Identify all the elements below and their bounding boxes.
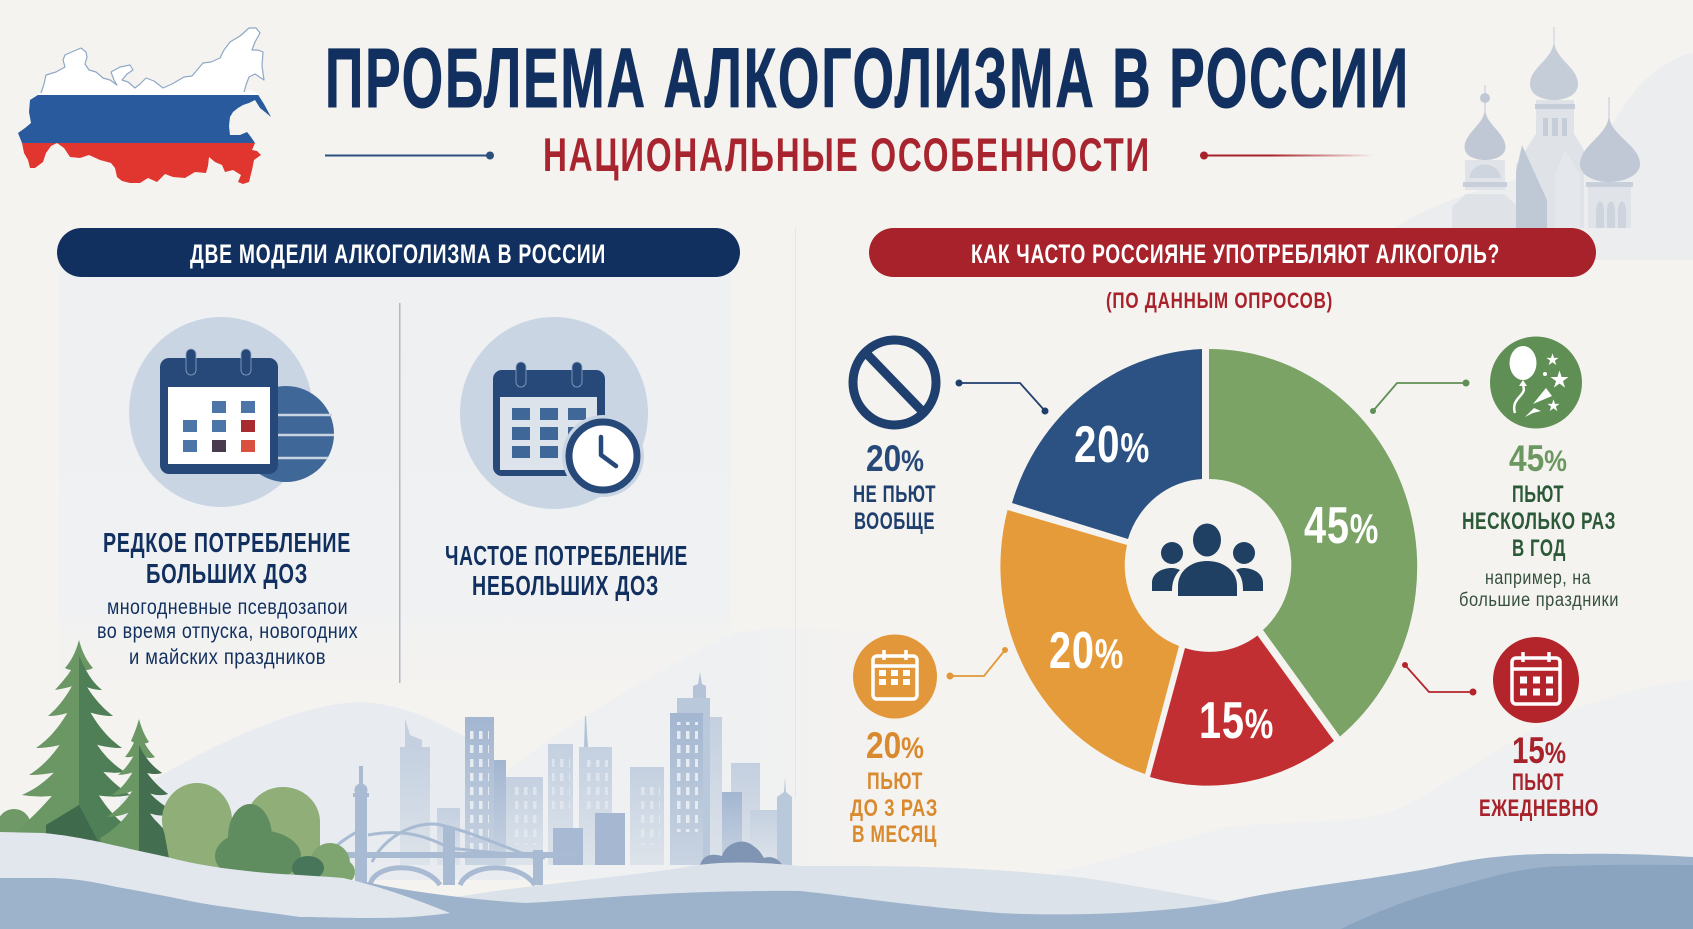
icon: prohibition [853, 340, 936, 425]
connector [956, 380, 1048, 414]
subtitle: НАЦИОНАЛЬНЫЕ ОСОБЕННОСТИ [543, 128, 1151, 181]
text: frequent small doses [445, 540, 688, 601]
callout: daily: 15% [1512, 730, 1566, 771]
callout: no drinking: ВООБЩЕ [854, 508, 935, 535]
callout: no drinking: 20% [866, 438, 924, 479]
slice: 20% orange: 20% [1049, 622, 1124, 680]
slice: 45% [1209, 349, 1417, 736]
icon: balloon and stars: ★ [1547, 398, 1560, 413]
callout: up to 3 times a month: В МЕСЯЦ [852, 821, 937, 848]
hill: right dark ground [1341, 865, 1693, 929]
callout: several times a year: например, на [1485, 568, 1591, 589]
callout: daily [1402, 637, 1599, 822]
city skyline [400, 672, 792, 865]
slice: 20% orange [1000, 510, 1179, 774]
icon: balloon and stars [1510, 346, 1569, 417]
left small bush [0, 809, 31, 843]
map of Russia in flag colours [18, 28, 271, 184]
callout: no drinking [853, 340, 1048, 535]
callout: several times a year: ПЬЮТ [1512, 481, 1564, 508]
text: frequent small doses: ЧАСТОЕ ПОТРЕБЛЕНИЕ [445, 540, 688, 571]
callout: up to 3 times a month: 20% [866, 725, 924, 766]
pie chart [1000, 349, 1417, 786]
connector [1370, 380, 1470, 414]
slice: 20% blue [1012, 349, 1202, 539]
callout: several times a year: НЕСКОЛЬКО РАЗ [1462, 508, 1616, 535]
text: rare large doses [97, 527, 358, 669]
callout: up to 3 times a month: ДО 3 РАЗ [850, 795, 938, 822]
background hills: left mountain [120, 629, 920, 880]
subtitle left rule [325, 152, 494, 160]
text: frequent small doses: НЕБОЛЬШИХ ДОЗ [472, 570, 659, 601]
left pill heading [57, 228, 740, 277]
icon: calendar with clock [460, 317, 648, 509]
callout: several times a year: большие праздники [1459, 590, 1619, 611]
section divider [795, 228, 796, 798]
callout: up to 3 times a month: ПЬЮТ [867, 768, 923, 795]
slice: 45%: 45% [1304, 497, 1379, 555]
background hill: right pale slope [1056, 680, 1693, 929]
icon: people [1152, 524, 1263, 596]
icon: calendar orange [873, 650, 917, 699]
text: rare large doses: многодневные псевдозапои [107, 596, 348, 619]
slice: 15%: 15% [1199, 692, 1274, 750]
icon: calendar red [1512, 652, 1560, 704]
text: rare large doses: во время отпуска, новогодних [97, 620, 358, 643]
background hill behind church [1395, 53, 1693, 260]
small blue bush [700, 842, 783, 866]
connector [946, 647, 1008, 680]
hill: left snow foreground [0, 832, 450, 918]
hill: bottom blue ground [0, 854, 1693, 929]
panel: frequency survey [850, 228, 1619, 848]
icon: calendar with globe [129, 317, 334, 507]
bridge [322, 766, 580, 885]
survey note: (ПО ДАННЫМ ОПРОСОВ) [1106, 288, 1333, 313]
callout: several times a year [1370, 336, 1619, 611]
hill: right snow band [440, 862, 1227, 929]
slice: 20% blue: 20% [1074, 416, 1150, 474]
bushes [162, 783, 355, 884]
text: rare large doses: РЕДКОЕ ПОТРЕБЛЕНИЕ [103, 527, 351, 558]
church silhouette [1452, 27, 1640, 228]
model divider [399, 303, 400, 683]
callout: several times a year: В ГОД [1512, 535, 1566, 562]
callout: daily: ЕЖЕДНЕВНО [1479, 795, 1599, 822]
callout: several times a year: 45% [1509, 438, 1567, 479]
callout: no drinking: НЕ ПЬЮТ [853, 481, 936, 508]
connector [1402, 662, 1476, 696]
big fir tree [22, 640, 130, 842]
left pill heading: ДВЕ МОДЕЛИ АЛКОГОЛИЗМА В РОССИИ [190, 239, 606, 269]
callout: up to 3 times a month [850, 634, 1008, 848]
text: rare large doses: БОЛЬШИХ ДОЗ [146, 558, 308, 589]
panel: two models [57, 228, 740, 700]
slice: 15% [1150, 636, 1334, 786]
text: rare large doses: и майских праздников [129, 646, 326, 669]
callout: daily: ПЬЮТ [1512, 769, 1564, 796]
small fir tree [100, 719, 169, 858]
icon: balloon and stars: ★ [1550, 370, 1569, 391]
subtitle right rule [1200, 152, 1374, 160]
right pill heading [869, 228, 1596, 277]
icon: balloon and stars: ★ [1546, 352, 1559, 367]
